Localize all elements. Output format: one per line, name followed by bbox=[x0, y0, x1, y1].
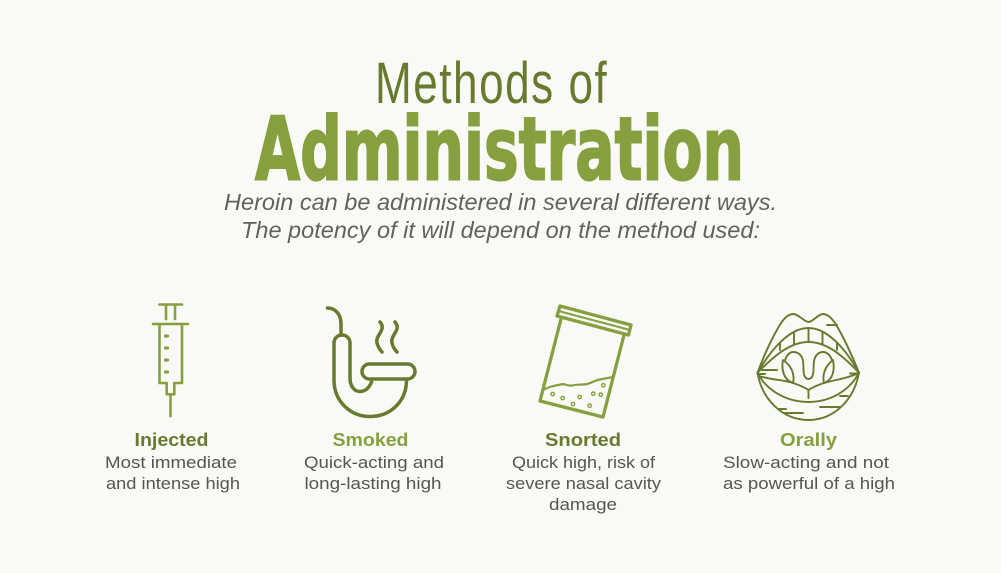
description: Orally bbox=[723, 453, 895, 493]
description: Smoked: long-lasting high bbox=[304, 474, 442, 493]
description: Injected: Most immediate bbox=[105, 453, 237, 472]
description: Snorted: severe nasal cavity bbox=[506, 474, 662, 493]
description: Smoked bbox=[304, 453, 444, 493]
icon: baggie bbox=[540, 306, 631, 417]
description: Injected: and intense high bbox=[106, 474, 240, 493]
icon: open mouth bbox=[758, 314, 859, 420]
subtitle bbox=[224, 189, 777, 243]
label: Snorted bbox=[506, 430, 662, 514]
title: Methods of: Methods of bbox=[375, 50, 607, 115]
subtitle: Heroin can be administered in several different ways. bbox=[224, 189, 777, 215]
label: Orally: Orally bbox=[780, 430, 837, 450]
description: Smoked: Quick-acting and bbox=[304, 453, 444, 472]
icon: pipe bbox=[328, 308, 415, 416]
title: Administration: Administration bbox=[255, 98, 744, 200]
description: Snorted: damage bbox=[549, 495, 617, 514]
subtitle: The potency of it will depend on the method used: bbox=[241, 217, 760, 243]
description: Injected bbox=[105, 453, 240, 493]
label: Injected bbox=[105, 430, 240, 493]
label: Orally bbox=[723, 430, 895, 493]
label: Snorted: Snorted bbox=[545, 430, 621, 450]
label: Injected: Injected bbox=[134, 430, 208, 450]
label: Smoked: Smoked bbox=[332, 430, 408, 450]
label: Smoked bbox=[304, 430, 444, 493]
description: Orally: as powerful of a high bbox=[723, 474, 895, 493]
icon: syringe bbox=[153, 304, 188, 416]
description: Orally: Slow-acting and not bbox=[723, 453, 889, 472]
description: Snorted bbox=[506, 453, 662, 514]
description: Snorted: Quick high, risk of bbox=[512, 453, 655, 472]
